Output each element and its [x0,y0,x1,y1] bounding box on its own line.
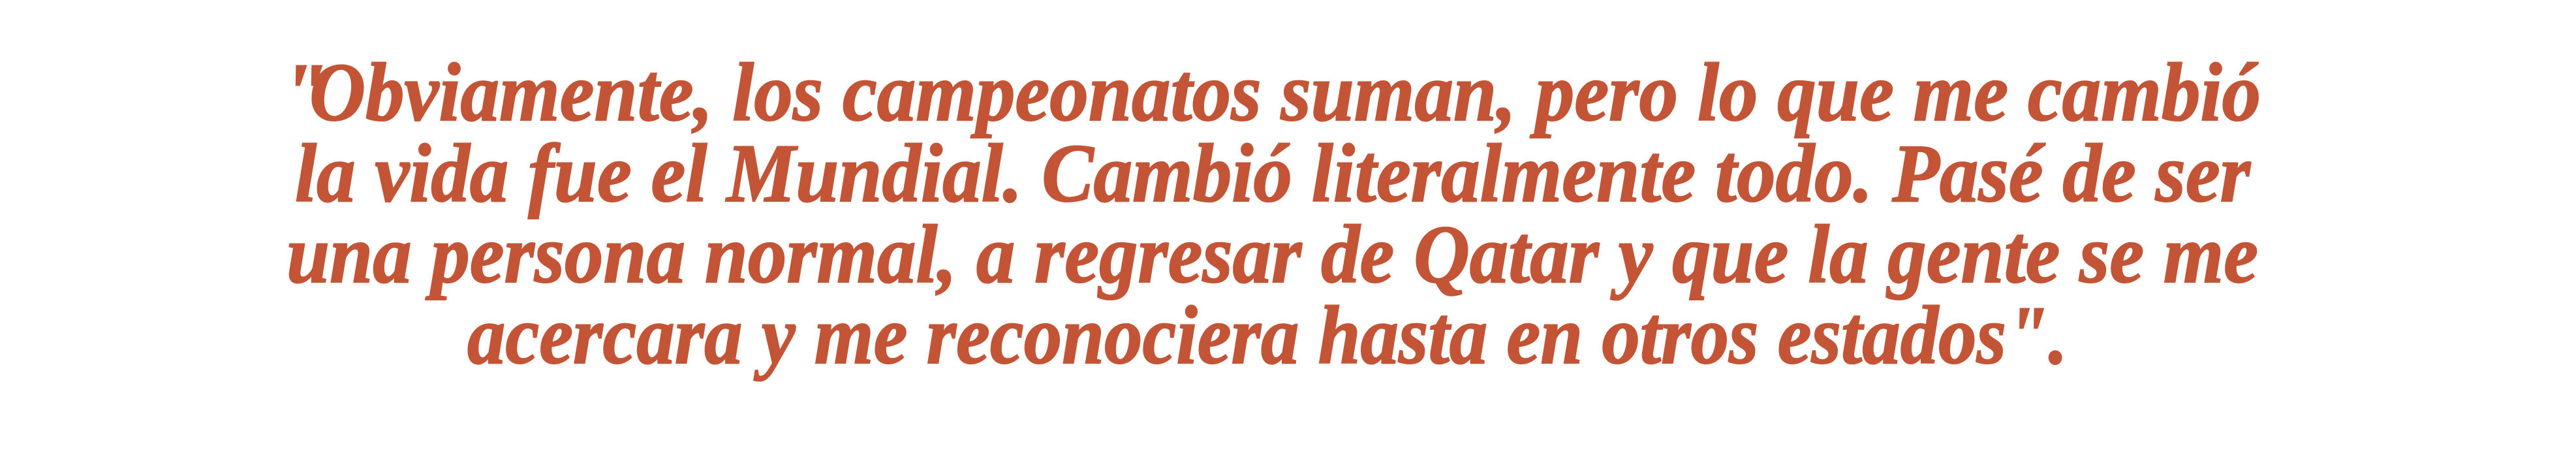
quote line 1: Obviamente, los campeonatos suman, pero lo que me cambió [309,47,2261,138]
quote text block [281,47,2261,381]
quote line 1: " [281,47,328,138]
quote line 2: la vida fue el Mundial. Cambió literalmente todo. Pasé de ser [295,128,2251,219]
quote line 3: una persona normal, a regresar de Qatar y que la gente se me [287,209,2258,300]
quote line 4: acercara y me reconociera hasta en otros estados". [467,290,2068,381]
